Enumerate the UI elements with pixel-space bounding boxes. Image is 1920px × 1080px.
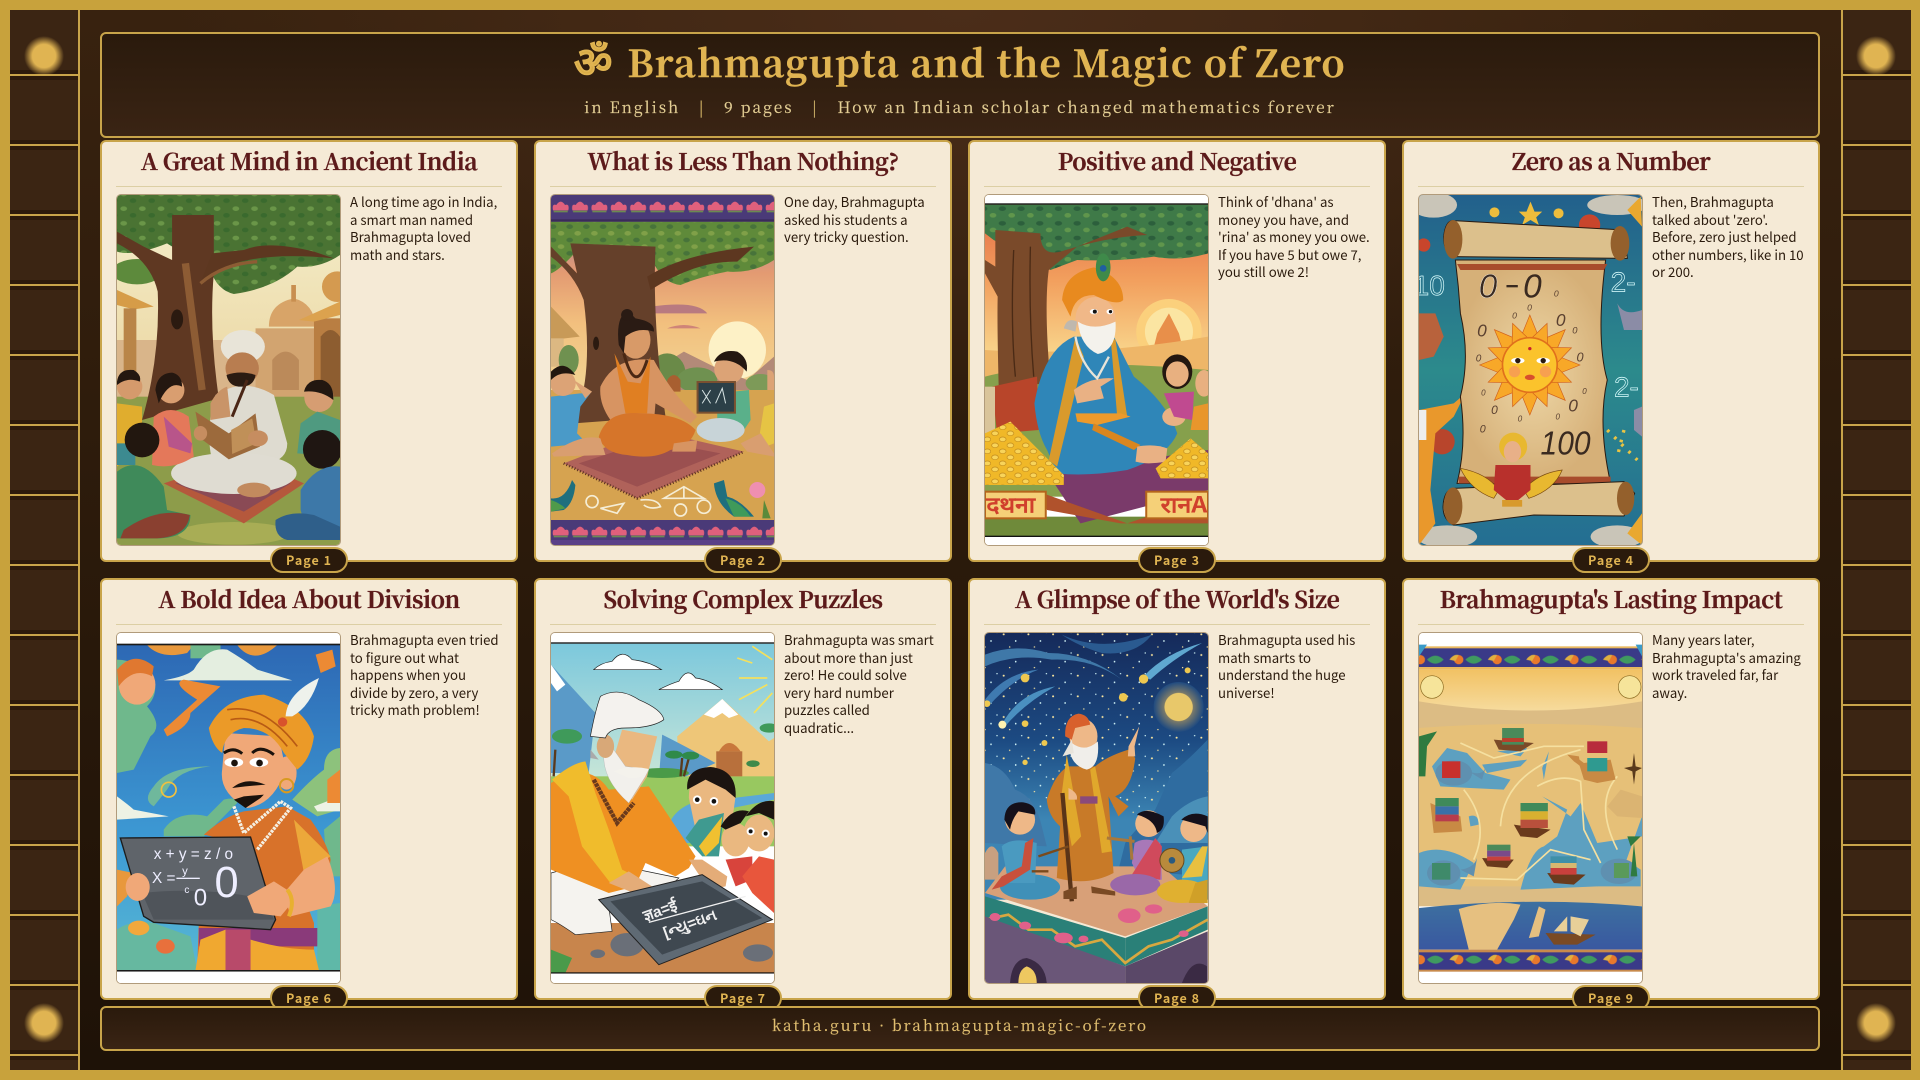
subtitle: in English | 9 pages | How an Indian scholar changed mathematics forever [584, 96, 1336, 118]
heading: A Glimpse of the World's Size [1015, 582, 1339, 615]
panel: page 6 [100, 578, 518, 1000]
illustration: scroll with sun and zeros: 0 [1478, 268, 1497, 305]
heading: Brahmagupta's Lasting Impact [1440, 582, 1782, 615]
page badge [270, 985, 348, 1011]
page badge: Page 4 [1588, 550, 1634, 569]
story text: very tricky question. [784, 227, 909, 246]
panel: page 2 [534, 140, 952, 562]
story text: a smart man named [350, 210, 473, 229]
panel: page 4 [1402, 140, 1820, 562]
illustration: world map with book routes [1418, 633, 1642, 983]
illustration: sage with gold coins: रानA [1159, 488, 1208, 520]
story text [784, 630, 934, 737]
story text: divide by zero, a very [350, 683, 478, 702]
page badge [704, 547, 782, 573]
medallion top right [1856, 36, 1896, 76]
page badge [270, 547, 348, 573]
illustration: scroll with sun and zeros: 0 [1572, 325, 1578, 335]
illustration: scroll with sun and zeros: 0 [1576, 351, 1583, 365]
medallion bottom right [1856, 1003, 1896, 1043]
story text: understand the huge [1218, 665, 1346, 684]
page badge: Page 8 [1154, 988, 1200, 1007]
story text: other numbers, like in 10 [1652, 245, 1804, 264]
illustration: scroll with sun and zeros: 0 [1582, 387, 1587, 396]
page badge [1572, 547, 1650, 573]
story text: puzzles called [784, 700, 870, 719]
story text: asked his students a [784, 210, 908, 229]
footer text: katha.guru · brahmagupta-magic-of-zero [772, 1015, 1148, 1036]
illustration: scroll with sun and zeros: 0 [1512, 310, 1517, 320]
panel: page 1 [100, 140, 518, 562]
story text [350, 192, 497, 264]
illustration: thinker holding a slate: X = [152, 870, 175, 887]
panel: page 3 [968, 140, 1386, 562]
footer panel [100, 1006, 1820, 1051]
illustration: scroll with sun and zeros: 0 [1491, 403, 1498, 417]
illustration: scroll with sun and zeros [1418, 195, 1642, 545]
title: ॐ Brahmagupta and the Magic of Zero [574, 34, 1346, 88]
story text [1218, 192, 1370, 281]
illustration: scroll with sun and zeros: 2- [1610, 267, 1635, 298]
story text: talked about 'zero'. [1652, 210, 1768, 229]
left pillar [10, 10, 80, 1070]
story text: Many years later, [1652, 630, 1755, 649]
story text: Brahmagupta used his [1218, 630, 1355, 649]
illustration: scroll with sun and zeros: 0 [1527, 303, 1532, 313]
illustration: scroll with sun and zeros: 0 [1477, 321, 1487, 341]
story text: or 200. [1652, 262, 1694, 281]
illustration: scroll with sun and zeros: 0 [1553, 289, 1558, 299]
illustration: scroll with sun and zeros: 0 [1481, 389, 1486, 398]
story text: A long time ago in India, [350, 192, 497, 211]
panel: page 9 [1402, 578, 1820, 1000]
illustration: scroll with sun and zeros: 100 [1540, 425, 1590, 462]
illustration: scroll with sun and zeros: 0 [1568, 396, 1578, 416]
illustration: sunset lesson with peacocks [550, 195, 774, 545]
story text [1218, 630, 1355, 702]
story text: universe! [1218, 683, 1275, 702]
story text [1652, 630, 1801, 702]
illustration: scroll with sun and zeros: 0 [1479, 424, 1485, 436]
story text: Brahmagupta was smart [784, 630, 934, 649]
medallion bottom left [24, 1003, 64, 1043]
story text [1652, 192, 1804, 281]
illustration: scroll with sun and zeros: 2- [1613, 372, 1638, 403]
header panel [100, 32, 1820, 138]
story text: money you have, and [1218, 210, 1349, 229]
story text: Then, Brahmagupta [1652, 192, 1774, 211]
illustration: scroll with sun and zeros: 0 [1555, 412, 1560, 421]
page badge: Page 1 [286, 550, 332, 569]
story text: about more than just [784, 648, 913, 667]
illustration: sage writing on a slate with children [550, 633, 774, 983]
heading: What is Less Than Nothing? [587, 144, 899, 177]
page badge [704, 985, 782, 1011]
story text: to figure out what [350, 648, 459, 667]
heading: Solving Complex Puzzles [603, 582, 883, 615]
story text: Before, zero just helped [1652, 227, 1796, 246]
story text: tricky math problem! [350, 700, 480, 719]
right pillar [1841, 10, 1911, 1070]
illustration: thinker holding a slate: 0 [193, 885, 207, 912]
page badge: Page 9 [1588, 988, 1634, 1007]
illustration: scroll with sun and zeros: 0 [1523, 268, 1542, 305]
illustration: thinker holding a slate: y [182, 866, 188, 878]
story text: quadratic... [784, 718, 854, 737]
story text: math smarts to [1218, 648, 1311, 667]
story text: Think of 'dhana' as [1218, 192, 1334, 211]
story text: Brahmagupta loved [350, 227, 471, 246]
heading: A Great Mind in Ancient India [141, 144, 477, 177]
story text: you still owe 2! [1218, 262, 1309, 281]
illustration: thinker holding a slate [116, 633, 340, 983]
illustration: sage writing on a slate with children: ज्ञa=ई [639, 895, 680, 925]
illustration: thinker holding a slate: c [184, 885, 189, 896]
page badge [1138, 547, 1216, 573]
illustration: teacher under a banyan tree [116, 195, 340, 545]
illustration: scroll with sun and zeros: 0 [1555, 310, 1565, 330]
story text: Brahmagupta even tried [350, 630, 499, 649]
panel: page 7 [534, 578, 952, 1000]
story text: happens when you [350, 665, 466, 684]
heading: Positive and Negative [1058, 144, 1296, 177]
story text [350, 630, 499, 719]
illustration: thinker holding a slate: 0 [214, 859, 238, 907]
story text: very hard number [784, 683, 894, 702]
story text: zero! He could solve [784, 665, 907, 684]
heading: A Bold Idea About Division [158, 582, 460, 615]
panel: page 8 [968, 578, 1386, 1000]
page badge [1572, 985, 1650, 1011]
page badge: Page 2 [720, 550, 766, 569]
story text: If you have 5 but owe 7, [1218, 245, 1361, 264]
illustration: astronomer on a rooftop at night [984, 633, 1208, 983]
illustration: scroll with sun and zeros: 0 [1475, 354, 1481, 365]
page badge: Page 7 [720, 988, 766, 1007]
page badge: Page 3 [1154, 550, 1200, 569]
story text [784, 192, 925, 246]
story text: One day, Brahmagupta [784, 192, 925, 211]
page badge: Page 6 [286, 988, 332, 1007]
illustration: sage with gold coins: दथना [985, 488, 1036, 520]
page badge [1138, 985, 1216, 1011]
illustration: sage writing on a slate with children: [ન્યુ=ઘન [661, 907, 719, 942]
illustration: sage with gold coins [984, 195, 1208, 545]
heading: Zero as a Number [1512, 144, 1710, 177]
illustration: scroll with sun and zeros: 0 [1517, 415, 1522, 424]
story text: away. [1652, 683, 1687, 702]
medallion top left [24, 36, 64, 76]
illustration: thinker holding a slate: x + y = z / o [153, 846, 233, 863]
story text: math and stars. [350, 245, 445, 264]
story text: Brahmagupta's amazing [1652, 648, 1801, 667]
story text: work traveled far, far [1652, 665, 1778, 684]
story text: 'rina' as money you owe. [1218, 227, 1370, 246]
